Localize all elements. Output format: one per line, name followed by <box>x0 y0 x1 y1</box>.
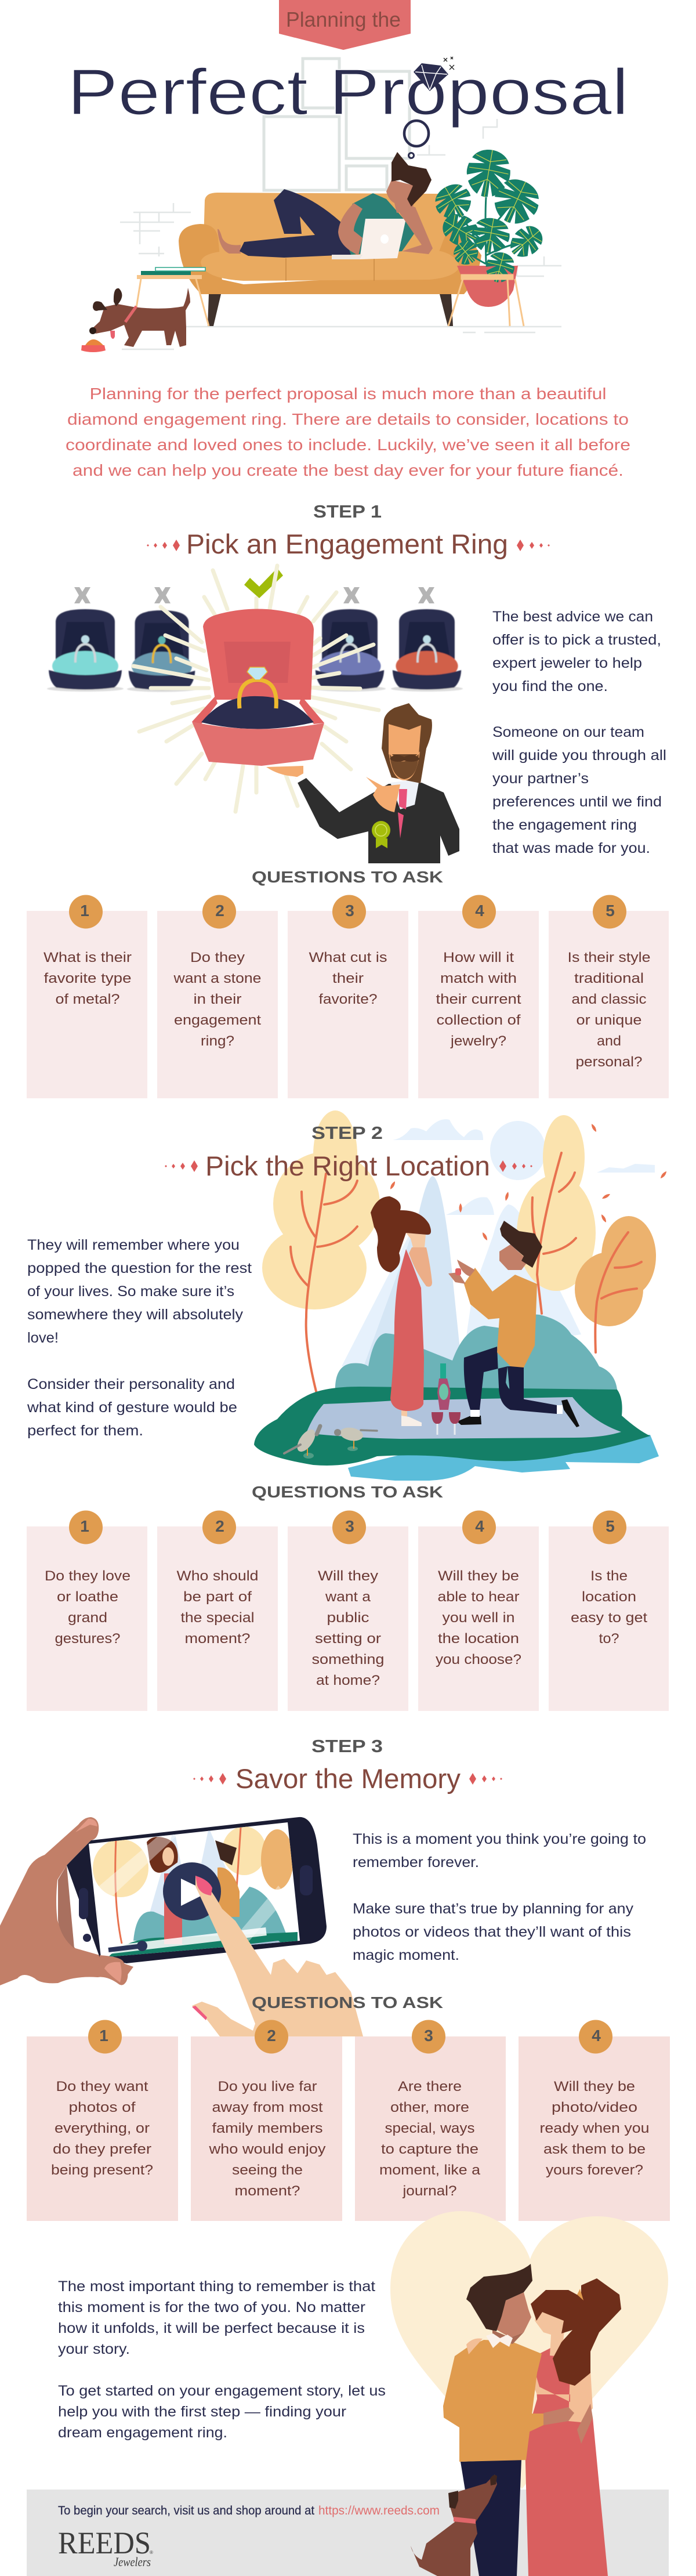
step 2 label: STEP 2 <box>311 1123 383 1143</box>
card 3 <box>355 2020 506 2221</box>
card 4: you choose? <box>436 1652 521 1667</box>
card 3: at home? <box>316 1673 380 1688</box>
card 4: yours forever? <box>546 2162 643 2178</box>
card 2: 2 <box>215 902 224 920</box>
icon: green check mark <box>244 568 283 598</box>
step 3 heading: Savor the Memory: Savor the Memory <box>235 1763 461 1794</box>
card 3: other, more <box>390 2100 469 2115</box>
intro paragraph <box>66 385 630 479</box>
step 3 text: Make sure that’s true by planning for any <box>353 1901 634 1917</box>
banner: Planning the <box>279 0 411 50</box>
icon: diamond <box>414 57 454 91</box>
card 1: What is their <box>44 950 132 965</box>
card 5: location <box>582 1589 636 1605</box>
card 5: easy to get <box>571 1610 647 1626</box>
card 5: and <box>597 1033 621 1049</box>
card 3 <box>288 1511 408 1711</box>
step 1 text: offer is to pick a trusted, <box>492 632 661 648</box>
step 1 text: your partner’s <box>492 770 589 787</box>
card 1: 1 <box>80 902 89 920</box>
closing text: help you with the first step — finding your <box>58 2404 346 2420</box>
step 2 text: Consider their personality and <box>27 1376 235 1392</box>
card 2 <box>191 2020 342 2221</box>
intro paragraph: coordinate and loved ones to include. Luckily, we’ve seen it all before <box>66 436 630 454</box>
card 2: in their <box>194 992 241 1007</box>
illustration: rejected ring boxes <box>47 568 463 692</box>
questions heading 3: QUESTIONS TO ASK <box>252 1993 443 2011</box>
closing text: your story. <box>58 2341 130 2357</box>
card 4: 4 <box>592 2027 601 2045</box>
card 5: Is their style <box>567 950 651 965</box>
card 1: gestures? <box>55 1631 121 1647</box>
card 1: grand <box>68 1610 107 1626</box>
step 3 text: photos or videos that they’ll want of this <box>353 1924 631 1940</box>
call to action: https://www.reeds.com <box>318 2504 440 2517</box>
card 5: personal? <box>575 1054 643 1070</box>
card 5 <box>549 1511 669 1711</box>
card 3: special, ways <box>385 2121 474 2136</box>
card 5: and classic <box>572 992 646 1007</box>
card 1 <box>27 1511 147 1711</box>
card 2 <box>157 1511 278 1711</box>
card 5: or unique <box>577 1012 641 1028</box>
card 2: family members <box>212 2121 322 2136</box>
questions heading 1: QUESTIONS TO ASK <box>252 868 443 886</box>
card 4 <box>418 895 539 1098</box>
logo: Reeds Jewelers: Jewelers <box>114 2555 151 2569</box>
closing text: how it unfolds, it will be perfect because it is <box>58 2320 365 2336</box>
card 4: the location <box>438 1631 519 1647</box>
card 5: 5 <box>606 1517 615 1535</box>
card 1: Do they want <box>56 2079 148 2094</box>
step 2 heading: Pick the Right Location: Pick the Right Location <box>205 1150 490 1181</box>
card 2: Do they <box>190 950 245 965</box>
wine bottle and glasses <box>432 1363 461 1435</box>
card 3: moment, like a <box>379 2162 481 2178</box>
step 1 text: expert jeweler to help <box>492 655 642 671</box>
step 1 text: Someone on our team <box>492 724 644 740</box>
icon: x marks <box>74 587 434 603</box>
card 3: public <box>327 1610 369 1626</box>
card 5 <box>549 895 669 1098</box>
card 2: be part of <box>183 1589 252 1605</box>
card 2: ring? <box>201 1033 234 1049</box>
step 2 text: popped the question for the rest <box>27 1260 252 1276</box>
closing text: this moment is for the two of you. No matter <box>58 2299 365 2315</box>
card 1: Do they love <box>45 1568 130 1584</box>
card 2: want a stone <box>173 971 261 986</box>
intro paragraph: diamond engagement ring. There are details to consider, locations to <box>67 410 629 428</box>
call to action <box>58 2504 440 2517</box>
card 2: Who should <box>176 1568 259 1584</box>
card 3: Are there <box>398 2079 462 2094</box>
card 3: want a <box>325 1589 371 1605</box>
panel: step 3 question cards <box>27 2020 670 2221</box>
card 4: 4 <box>475 902 484 920</box>
banner: Planning the: Planning the <box>286 8 401 31</box>
step 1 text: preferences until we find <box>492 794 662 810</box>
step 1 text: will guide you through all <box>492 747 666 764</box>
card 4 <box>519 2020 670 2221</box>
call to action: To begin your search, visit us and shop around at <box>58 2504 314 2517</box>
illustration: man on sofa daydreaming with dog and plant <box>81 59 561 352</box>
card 2: moment? <box>234 2183 300 2199</box>
card 4: Will they be <box>554 2079 635 2094</box>
step 3 text: This is a moment you think you’re going to <box>353 1831 646 1847</box>
step 1 heading: Pick an Engagement Ring: Pick an Engagement Ring <box>186 529 508 559</box>
card 3: journal? <box>402 2183 457 2199</box>
step 1 text: the engagement ring <box>492 817 637 833</box>
illustration: hands holding phone with video <box>0 1817 363 2036</box>
logo: Reeds Jewelers: REEDS <box>58 2526 151 2560</box>
logo: Reeds Jewelers: ® <box>150 2550 153 2555</box>
card 1: do they prefer <box>53 2141 151 2157</box>
closing text: dream engagement ring. <box>58 2425 227 2441</box>
card 4: photo/video <box>552 2100 637 2115</box>
card 4: collection of <box>436 1012 521 1028</box>
step 3 text <box>353 1831 646 1963</box>
card 4 <box>418 1511 539 1711</box>
panel: step 1 question cards <box>27 895 669 1098</box>
card 1: photos of <box>68 2100 136 2115</box>
card 4: you well in <box>442 1610 515 1626</box>
card 1: 1 <box>80 1517 89 1535</box>
woman <box>371 1196 432 1426</box>
card 5: traditional <box>574 971 644 986</box>
step 2 text: what kind of gesture would be <box>27 1399 237 1416</box>
card 5: 5 <box>606 902 615 920</box>
icon: thought bubble <box>404 121 429 158</box>
closing text <box>58 2278 386 2441</box>
step 2 text: of your lives. So make sure it’s <box>27 1283 234 1300</box>
card 4: ask them to be <box>543 2141 646 2157</box>
card 2: 2 <box>267 2027 276 2045</box>
card 4: their current <box>436 992 521 1007</box>
step 3 text: magic moment. <box>353 1947 459 1963</box>
step 3 text: remember forever. <box>353 1854 479 1871</box>
card 2: who would enjoy <box>208 2141 326 2157</box>
card 5: to? <box>599 1631 619 1647</box>
card 3: What cut is <box>309 950 387 965</box>
card 4: How will it <box>443 950 514 965</box>
card 1: being present? <box>51 2162 153 2178</box>
card 3: 3 <box>345 1517 354 1535</box>
card 2: engagement <box>174 1012 261 1028</box>
card 1: of metal? <box>56 992 119 1007</box>
card 1: favorite type <box>44 971 131 986</box>
illustration: couple embracing in front of heart with dog <box>390 2211 668 2576</box>
step 2 text: They will remember where you <box>27 1237 240 1253</box>
phone <box>67 1817 327 1963</box>
title: Perfect Proposal <box>67 56 629 158</box>
questions heading 2: QUESTIONS TO ASK <box>252 1483 443 1501</box>
illustration: jeweler presenting ring box with light rays <box>133 566 459 863</box>
closing text: To get started on your engagement story, let us <box>58 2383 386 2399</box>
card 1 <box>27 895 147 1098</box>
step 1 text: that was made for you. <box>492 840 650 856</box>
step 2 text: somewhere they will absolutely <box>27 1307 244 1323</box>
step 3 label: STEP 3 <box>311 1736 383 1756</box>
card 1 <box>27 2020 178 2221</box>
card 2: the special <box>181 1610 254 1626</box>
illustration: proposal scene in park <box>254 1110 668 1481</box>
card 4: match with <box>440 971 517 986</box>
card 3: their <box>332 971 364 986</box>
panel: step 2 question cards <box>27 1511 669 1711</box>
step 2 text: perfect for them. <box>27 1423 143 1439</box>
intro paragraph: Planning for the perfect proposal is much more than a beautiful <box>89 385 607 403</box>
closing text: The most important thing to remember is that <box>58 2278 375 2295</box>
card 1: everything, or <box>55 2121 150 2136</box>
card 3: 3 <box>345 902 354 920</box>
step 1 label: STEP 1 <box>313 501 382 522</box>
card 3: something <box>312 1652 384 1667</box>
card 2 <box>157 895 278 1098</box>
card 4: able to hear <box>437 1589 520 1605</box>
card 3: to capture the <box>381 2141 478 2157</box>
step 1 text <box>492 609 666 856</box>
title: Perfect Proposal: Perfect Proposal <box>67 56 629 128</box>
card 3: setting or <box>315 1631 381 1647</box>
step 1 text: The best advice we can <box>492 609 653 625</box>
card 4: Will they be <box>438 1568 519 1584</box>
intro paragraph: and we can help you create the best day ever for your future fiancé. <box>72 461 624 479</box>
card 4: 4 <box>475 1517 484 1535</box>
card 3: favorite? <box>319 992 377 1007</box>
card 2: moment? <box>184 1631 251 1647</box>
step 1 text: you find the one. <box>492 678 608 694</box>
card 5: Is the <box>590 1568 628 1584</box>
step 2 text: love! <box>27 1330 59 1346</box>
card 4: jewelry? <box>450 1033 506 1049</box>
card 4: ready when you <box>539 2121 650 2136</box>
step 2 text <box>27 1237 252 1439</box>
card 2: away from most <box>212 2100 323 2115</box>
card 1: 1 <box>99 2027 108 2045</box>
card 2: Do you live far <box>218 2079 317 2094</box>
man kneeling <box>448 1221 579 1427</box>
pigeons <box>284 1426 377 1459</box>
card 3: Will they <box>318 1568 378 1584</box>
card 2: 2 <box>215 1517 224 1535</box>
footer band with call to action and logo <box>27 2490 669 2576</box>
card 3: 3 <box>424 2027 433 2045</box>
card 1: or loathe <box>57 1589 118 1605</box>
card 3 <box>288 895 408 1098</box>
card 2: seeing the <box>232 2162 303 2178</box>
